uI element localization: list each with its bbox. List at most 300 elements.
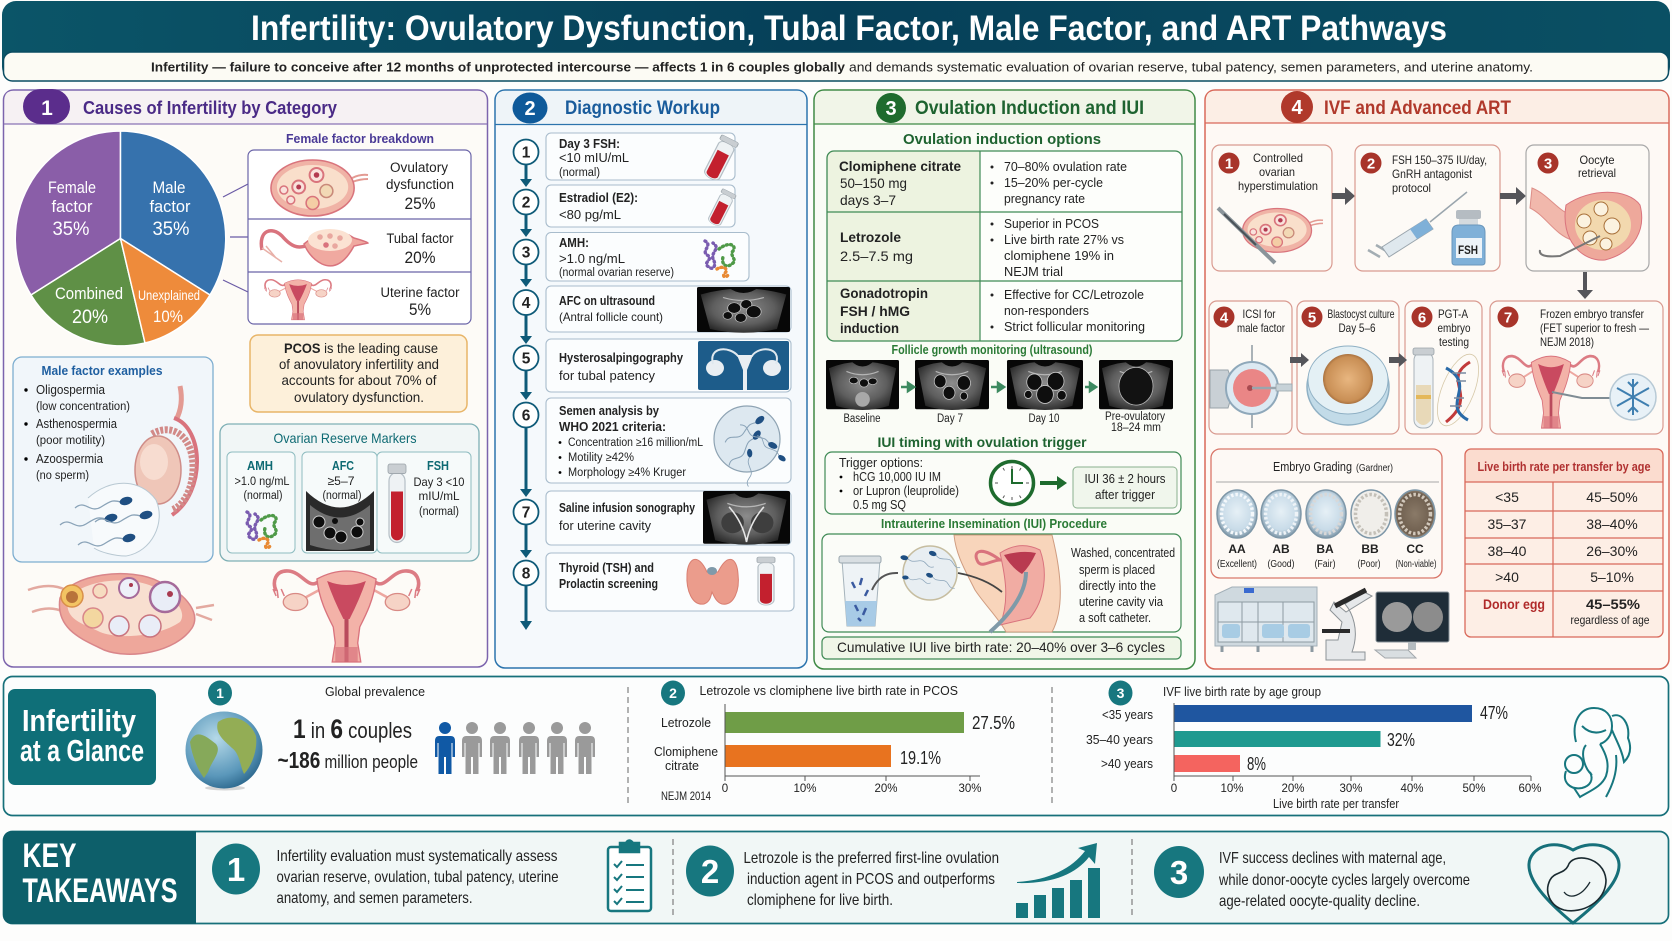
- illustration: IUI anatomy: [954, 535, 1060, 632]
- panel: infertility at a glance: [4, 676, 1668, 816]
- takeaways label: [3, 831, 196, 924]
- pie chart: 20%: [72, 307, 108, 328]
- step 4: ICSI: [1209, 301, 1292, 434]
- step 6 card: Semen analysis by: [559, 404, 659, 418]
- glance label: Infertility: [22, 703, 137, 738]
- step 4 card: (Antral follicle count): [559, 310, 663, 324]
- pie chart: 35%: [152, 219, 190, 240]
- chart: letrozole vs clomiphene: Letrozole: [661, 715, 711, 730]
- step 7 card: [546, 491, 791, 545]
- step 6 card: Concentration ≥16 million/mL: [568, 437, 704, 449]
- table: ovulation induction: pregnancy rate: [1004, 192, 1085, 206]
- takeaway 2: clomiphene for live birth.: [747, 892, 893, 909]
- follicle ultrasound strip: 18–24 mm: [1111, 422, 1161, 434]
- table: ovulation induction: Letrozole: [840, 229, 901, 245]
- table: live birth rate by age: 5–10%: [1590, 569, 1634, 585]
- header banner: [2, 1, 1670, 81]
- image: HSG: [698, 341, 789, 390]
- table: ovulation induction: Live birth rate 27% vs: [1004, 233, 1124, 247]
- marker: AFC: [302, 452, 377, 553]
- table: ovulation induction: induction: [840, 320, 899, 336]
- illustration: retrieval: [1530, 188, 1642, 260]
- embryo grades: (Fair): [1314, 559, 1336, 570]
- male factor list: (poor motility): [36, 435, 105, 447]
- step 5 card: for tubal patency: [559, 369, 656, 383]
- pie chart: Male: [152, 178, 186, 197]
- icon: heart with fetus: [1529, 845, 1619, 923]
- table: live birth rate by age: 26–30%: [1586, 543, 1638, 559]
- table: ovulation induction: clomiphene 19% in: [1004, 249, 1114, 263]
- embryo grades: (Good): [1268, 559, 1294, 570]
- step 7: frozen embryo transfer: [1490, 301, 1663, 434]
- chart: letrozole vs clomiphene: 19.1%: [900, 748, 941, 768]
- step numbers: [522, 144, 531, 582]
- embryo grades: AB: [1272, 542, 1290, 556]
- pie chart: 35%: [52, 219, 90, 240]
- icon: checklist: [608, 840, 651, 911]
- icon: syringe: [1368, 192, 1467, 257]
- result box: [1073, 467, 1177, 508]
- chart: IVF live birth by age: >40 years: [1101, 756, 1153, 771]
- takeaway 3: [1154, 846, 1470, 910]
- chart: letrozole vs clomiphene: 10%: [793, 783, 817, 795]
- embryo grades: BA: [1316, 542, 1334, 556]
- callout: cumulative IUI rate: Cumulative IUI live birth rate: 20–40% over 3–6 cycles: [837, 639, 1165, 655]
- takeaway 1: 1: [227, 851, 245, 888]
- step 5: blastocyst: Blastocyst culture: [1328, 307, 1395, 321]
- step 3 card: AMH:: [559, 236, 589, 250]
- table: live birth rate by age: 45–55%: [1586, 596, 1641, 612]
- male factor list: [24, 382, 130, 482]
- follicle ultrasound strip: [826, 360, 1173, 434]
- step 3 card: [546, 232, 749, 281]
- marker: AFC: AFC: [332, 459, 354, 473]
- marker: FSH: (normal): [419, 506, 459, 518]
- chart: IVF live birth by age: 0: [1171, 783, 1177, 795]
- chart: IVF live birth by age: 32%: [1387, 730, 1415, 750]
- icon: thyroid: [687, 559, 738, 604]
- icon: uterus: [264, 280, 332, 320]
- chart: letrozole vs clomiphene: citrate: [665, 758, 699, 773]
- step 6 card: [546, 398, 791, 487]
- panel: IVF and advanced ART: [1205, 90, 1669, 669]
- illustration: ovary with follicles: [28, 574, 214, 654]
- section badge 4: [1281, 91, 1313, 123]
- takeaway 3: IVF success declines with maternal age,: [1219, 850, 1446, 867]
- step 6: PGT-A: 6: [1418, 310, 1426, 326]
- trigger box: [825, 452, 1181, 514]
- icon: tube: [1413, 348, 1434, 428]
- marker: AMH: (normal): [244, 490, 283, 502]
- panel: causes of infertility: [4, 89, 488, 667]
- panel: male factor examples: [13, 357, 213, 562]
- embryo grades: CC: [1406, 542, 1424, 556]
- step 5: blastocyst: [1297, 301, 1399, 434]
- tubal text: [386, 231, 454, 267]
- step 5 card: [546, 339, 791, 392]
- procedure description: a soft catheter.: [1079, 611, 1151, 625]
- title: Infertility: Ovulatory Dysfunction, Tubal Factor, Male Factor, and ART Pathways: [251, 9, 1447, 48]
- result box: after trigger: [1095, 488, 1155, 502]
- step 1: stimulation: [1212, 145, 1332, 271]
- icon: DNA helix: [1429, 349, 1487, 431]
- table: live birth rate by age: 38–40: [1488, 543, 1527, 559]
- table: live birth rate by age: regardless of age: [1570, 613, 1650, 627]
- timeline arrows: [520, 165, 532, 630]
- chart: IVF live birth by age: 10%: [1220, 783, 1244, 795]
- icon: testis: [135, 386, 197, 515]
- illustration: lab equipment: [1215, 587, 1449, 660]
- pie chart: factor: [52, 197, 93, 216]
- chart: IVF live birth by age: 50%: [1462, 783, 1486, 795]
- arrow: circle to catheter: [958, 573, 1002, 592]
- illustration: uterus: [273, 571, 420, 662]
- chart: IVF live birth by age: 8%: [1247, 754, 1266, 774]
- step 6: PGT-A: embryo: [1438, 321, 1471, 335]
- step 5: blastocyst: Day 5–6: [1338, 321, 1376, 335]
- follicle ultrasound strip: Day 10: [1028, 413, 1060, 425]
- table: ovulation induction: Effective for CC/Letrozole: [1004, 288, 1144, 302]
- arrow: [1389, 353, 1407, 367]
- takeaway 1: [212, 844, 559, 907]
- chart: IVF live birth by age: IVF live birth rate by age group: [1163, 684, 1321, 699]
- step 7: frozen embryo transfer: 7: [1504, 310, 1512, 326]
- icon: rising bars: [1016, 843, 1100, 918]
- marker: AFC: (normal): [322, 490, 362, 502]
- table: ovulation induction: 70–80% ovulation rate: [1004, 160, 1127, 174]
- step 4: ICSI: male factor: [1237, 321, 1285, 335]
- trigger box: hCG 10,000 IU IM: [853, 470, 941, 484]
- table: ovulation induction: 50–150 mg: [840, 175, 907, 191]
- step 2: FSH protocol: GnRH antagonist: [1392, 167, 1473, 181]
- section badge 3: [876, 93, 906, 123]
- chart: letrozole vs clomiphene: Letrozole vs clomiphene live birth rate in PCOS: [700, 683, 958, 698]
- icon: mother and child: [1565, 708, 1630, 797]
- table: live birth rate by age: <35: [1495, 489, 1519, 505]
- subtitle strip: [4, 52, 1668, 81]
- section heading: Ovulation Induction and IUI: [915, 98, 1144, 119]
- procedure description: directly into the: [1079, 579, 1156, 593]
- marker: AMH: >1.0 ng/mL: [234, 474, 290, 488]
- chart: IVF live birth by age: 40%: [1400, 783, 1424, 795]
- arrow: [1040, 476, 1067, 490]
- ovulatory text: 25%: [404, 194, 436, 213]
- takeaways label: KEY: [22, 837, 77, 875]
- table: ovulation induction: 2.5–7.5 mg: [840, 248, 913, 264]
- arrow: [1290, 353, 1309, 367]
- takeaways label: TAKEAWAYS: [22, 872, 178, 910]
- table: ovulation induction: non-responders: [1004, 304, 1089, 318]
- step numbers: 6: [522, 408, 531, 424]
- step 6 card: Morphology ≥4% Kruger: [568, 467, 686, 479]
- step 7: frozen embryo transfer: Frozen embryo transfer: [1540, 307, 1644, 321]
- icon: ovary: [271, 160, 368, 216]
- step 3: oocyte retrieval: [1526, 145, 1649, 271]
- tubal text: Tubal factor: [386, 231, 454, 246]
- step 7 card: Saline infusion sonography: [559, 501, 695, 515]
- takeaway 1: anatomy, and semen parameters.: [276, 890, 472, 907]
- takeaway 2: [686, 846, 999, 909]
- marker: FSH: Day 3 <10: [414, 475, 465, 489]
- table: ovulation induction: Strict follicular monitoring: [1004, 320, 1145, 334]
- step 2: FSH protocol: protocol: [1392, 181, 1431, 195]
- step 2: FSH protocol: FSH 150–375 IU/day,: [1392, 153, 1487, 167]
- section heading: IVF and Advanced ART: [1324, 98, 1511, 119]
- arrow: [1332, 187, 1355, 205]
- chart: letrozole vs clomiphene: 0: [722, 783, 728, 795]
- step 3: oocyte retrieval: retrieval: [1578, 166, 1616, 180]
- embryo grades: (Excellent): [1217, 559, 1257, 570]
- IUI procedure heading: Intrauterine Insemination (IUI) Procedure: [881, 517, 1107, 531]
- icon: six people: [435, 722, 595, 774]
- chart: letrozole vs clomiphene: 20%: [874, 783, 898, 795]
- IUI procedure box: [822, 534, 1181, 632]
- male factor list: Azoospermia: [36, 451, 104, 466]
- step 4 card: [546, 286, 791, 333]
- tubal text: 20%: [404, 248, 436, 267]
- step numbers: 1: [522, 144, 531, 162]
- takeaway 3: age-related oocyte-quality decline.: [1219, 893, 1420, 910]
- step 6: PGT-A: [1405, 301, 1487, 434]
- table: ovulation induction: Superior in PCOS: [1004, 217, 1099, 231]
- step 2 card: Estradiol (E2):: [559, 191, 638, 205]
- panel: key takeaways: [3, 831, 1668, 924]
- pie chart: factor: [150, 197, 191, 216]
- badge: [1108, 680, 1132, 706]
- badge: [208, 680, 232, 706]
- step 1 card: Day 3 FSH:: [559, 137, 620, 151]
- pie chart: [15, 131, 226, 346]
- takeaway 3: 3: [1170, 854, 1188, 891]
- step numbers: 3: [522, 244, 531, 262]
- step circles: [514, 140, 538, 586]
- table: live birth rate by age: [1465, 449, 1663, 637]
- subtitle strip: and demands systematic evaluation of ovarian reserve, tubal patency, semen parameters, and uterine anatomy.: [849, 60, 1533, 74]
- section badge 3: 3: [885, 98, 897, 120]
- badge: 2: [669, 685, 677, 701]
- image: sperm under microscope: [714, 406, 788, 487]
- embryo grading card: (Gardner): [1356, 462, 1393, 474]
- panel: diagnostic workup: [495, 90, 807, 668]
- follicle ultrasound strip: Pre-ovulatory: [1105, 411, 1165, 423]
- male factor list: (low concentration): [36, 401, 130, 413]
- panel: ovarian reserve markers: [220, 424, 479, 561]
- takeaway 2: 2: [701, 853, 719, 890]
- table: live birth rate by age: 45–50%: [1586, 489, 1638, 505]
- glance label: at a Glance: [20, 733, 144, 768]
- chart: IVF live birth by age: [1086, 684, 1542, 811]
- embryo grades: (Poor): [1358, 559, 1380, 570]
- badge: [661, 680, 685, 706]
- step 7: frozen embryo transfer: NEJM 2018): [1540, 335, 1594, 349]
- follicle ultrasound strip: Day 7: [937, 413, 963, 425]
- image: follicle ultrasound: [306, 491, 374, 551]
- step 1: stimulation: Controlled: [1253, 151, 1303, 165]
- step 1 card: (normal): [559, 167, 600, 179]
- callout: PCOS: [250, 335, 467, 412]
- step numbers: 7: [522, 504, 530, 522]
- subheading: Ovulation induction options: [903, 132, 1101, 148]
- pie chart: Combined: [55, 284, 123, 303]
- section badge 1: [23, 89, 70, 124]
- table: live birth rate by age: Donor egg: [1483, 596, 1545, 612]
- embryo grades: AA: [1228, 542, 1246, 556]
- callout: PCOS: of anovulatory infertility and: [279, 356, 439, 372]
- step 5: blastocyst: 5: [1308, 310, 1316, 326]
- marker: FSH: mIU/mL: [418, 489, 460, 503]
- glance label: [8, 689, 156, 785]
- step 3 card: >1.0 ng/mL: [559, 252, 625, 266]
- icon: petri dish: [1307, 346, 1389, 425]
- chart: letrozole vs clomiphene: NEJM 2014: [661, 791, 711, 803]
- ovulatory text: [386, 160, 454, 213]
- table: ovulation induction: Gonadotropin: [840, 285, 928, 301]
- step 2: FSH protocol: [1355, 145, 1500, 271]
- callout: cumulative IUI rate: [822, 637, 1181, 659]
- callout: PCOS: ovulatory dysfunction.: [294, 389, 424, 405]
- step 7: frozen embryo transfer: (FET superior to fresh —: [1540, 321, 1649, 335]
- takeaway 1: ovarian reserve, ovulation, tubal patency, uterine: [276, 869, 559, 886]
- step 6 card: Motility ≥42%: [568, 452, 634, 464]
- section badge 2: 2: [524, 98, 536, 120]
- icon: sperm circle: [60, 483, 159, 556]
- procedure description: Washed, concentrated: [1071, 546, 1175, 560]
- result box: IUI 36 ± 2 hours: [1084, 472, 1166, 486]
- chart: IVF live birth by age: 60%: [1518, 783, 1542, 795]
- stat: global prevalence: [278, 684, 425, 773]
- table: ovulation induction: 15–20% per-cycle: [1004, 176, 1103, 190]
- panel: male factor examples: Male factor examples: [42, 363, 162, 378]
- chart: letrozole vs clomiphene: [654, 683, 1015, 803]
- embryo grading card: Embryo Grading: [1273, 459, 1352, 474]
- step numbers: 2: [522, 194, 530, 212]
- section badge 2: [512, 92, 548, 124]
- chart: letrozole vs clomiphene: Clomiphene: [654, 744, 718, 759]
- uterine text: [380, 285, 460, 319]
- table: ovulation induction: Clomiphene citrate: [839, 158, 961, 174]
- chart: IVF live birth by age: 47%: [1480, 703, 1508, 723]
- icon: clock: [990, 462, 1034, 504]
- male factor list: Asthenospermia: [36, 416, 118, 431]
- table: ovulation induction: FSH / hMG: [840, 303, 910, 319]
- male factor list: Oligospermia: [36, 382, 106, 397]
- ovulatory text: Ovulatory: [390, 160, 448, 175]
- panel: ovarian reserve markers: Ovarian Reserve Markers: [274, 430, 416, 446]
- stat: global prevalence: Global prevalence: [325, 684, 425, 699]
- step 3 card: (normal ovarian reserve): [559, 267, 674, 279]
- step 3: oocyte retrieval: 3: [1544, 156, 1552, 172]
- takeaway 2: induction agent in PCOS and outperforms: [747, 871, 995, 888]
- step numbers: 8: [522, 566, 531, 582]
- step 1 card: [546, 133, 739, 183]
- chart: letrozole vs clomiphene: 27.5%: [972, 713, 1015, 733]
- procedure description: sperm is placed: [1079, 563, 1155, 577]
- step 7 card: for uterine cavity: [559, 519, 652, 533]
- table: live birth rate by age: 38–40%: [1586, 516, 1638, 532]
- step numbers: 5: [522, 350, 531, 368]
- step 4: ICSI: 4: [1220, 310, 1229, 326]
- icon: specimen cup: [839, 556, 881, 626]
- marker: AFC: ≥5–7: [328, 474, 355, 488]
- icon: FSH vial: [1452, 210, 1485, 265]
- section heading: Diagnostic Workup: [565, 98, 720, 119]
- chart: IVF live birth by age: 30%: [1339, 783, 1363, 795]
- step 6: PGT-A: PGT-A: [1438, 307, 1468, 321]
- male factor list: (no sperm): [36, 470, 89, 482]
- embryo grades: (Non-viable): [1396, 559, 1436, 570]
- chart: letrozole vs clomiphene: 30%: [958, 783, 982, 795]
- step 8 card: [546, 553, 794, 611]
- table: live birth rate by age: >40: [1495, 569, 1519, 585]
- icon: magnified sperm: [899, 546, 960, 600]
- marker: AMH: AMH: [247, 459, 273, 473]
- icon: globe: [186, 712, 262, 790]
- step 2 card: [546, 185, 736, 228]
- embryo grades: BB: [1361, 542, 1379, 556]
- section badge 4: 4: [1291, 97, 1303, 119]
- table: ovulation induction: NEJM trial: [1004, 265, 1063, 279]
- image: sonography: [703, 491, 790, 545]
- icon: FSH vial: FSH: [1458, 243, 1478, 257]
- chart: IVF live birth by age: 35–40 years: [1086, 732, 1153, 747]
- follicle monitoring heading: Follicle growth monitoring (ultrasound): [892, 343, 1092, 357]
- step 5 card: Hysterosalpingography: [559, 351, 683, 365]
- table: ovulation induction: [827, 151, 1182, 341]
- step 4: ICSI: ICSI for: [1242, 307, 1276, 321]
- callout: PCOS: PCOS is the leading cause: [284, 340, 438, 356]
- pie chart: Unexplained: [138, 287, 200, 303]
- trigger box: 0.5 mg SQ: [853, 498, 906, 512]
- uterine text: 5%: [409, 300, 431, 319]
- chart: IVF live birth by age: 20%: [1281, 783, 1305, 795]
- step numbers: 4: [522, 295, 531, 312]
- embryo grading card: [1211, 449, 1442, 578]
- badge: 3: [1117, 685, 1125, 701]
- trigger box: Trigger options:: [839, 455, 923, 470]
- icon: snowflake: [1610, 374, 1656, 420]
- marker: AMH: [227, 452, 295, 553]
- icon: tube and ovary: [261, 229, 368, 266]
- callout: PCOS: accounts for about 70% of: [282, 372, 437, 388]
- pie chart: 10%: [153, 307, 183, 326]
- arrow: [1500, 187, 1526, 205]
- breakdown box: [248, 150, 471, 324]
- icon: oocyte injection: [1210, 345, 1292, 428]
- step 2 card: <80 pg/mL: [559, 208, 621, 222]
- stat: global prevalence: 1 in 6 couples: [293, 714, 412, 744]
- badge: 1: [216, 685, 224, 701]
- stat: global prevalence: ~186 million people: [278, 747, 418, 773]
- icon: catheter: [1552, 392, 1610, 398]
- step 1: stimulation: ovarian: [1259, 165, 1295, 179]
- pie chart: Female: [48, 178, 96, 197]
- chart: IVF live birth by age: <35 years: [1102, 707, 1153, 722]
- table: live birth rate by age: 35–37: [1488, 516, 1527, 532]
- section badge 1: 1: [41, 97, 53, 120]
- table: ovulation induction: days 3–7: [840, 192, 896, 208]
- trigger box: or Lupron (leuprolide): [853, 484, 959, 498]
- panel: ovulation induction and IUI: [814, 90, 1195, 669]
- breakdown heading: Female factor breakdown: [286, 131, 434, 146]
- subtitle strip: Infertility — failure to conceive after 12 months of unprotected intercourse — affects 1 in 6 couples globally: [151, 60, 846, 74]
- marker: FSH: [377, 452, 471, 553]
- section heading: Causes of Infertility by Category: [83, 97, 338, 118]
- step 2: FSH protocol: 2: [1367, 156, 1375, 172]
- marker: FSH: FSH: [427, 459, 449, 473]
- step 6 card: WHO 2021 criteria:: [559, 420, 666, 434]
- step 1: stimulation: hyperstimulation: [1238, 179, 1318, 193]
- embryo grades: [1217, 490, 1436, 570]
